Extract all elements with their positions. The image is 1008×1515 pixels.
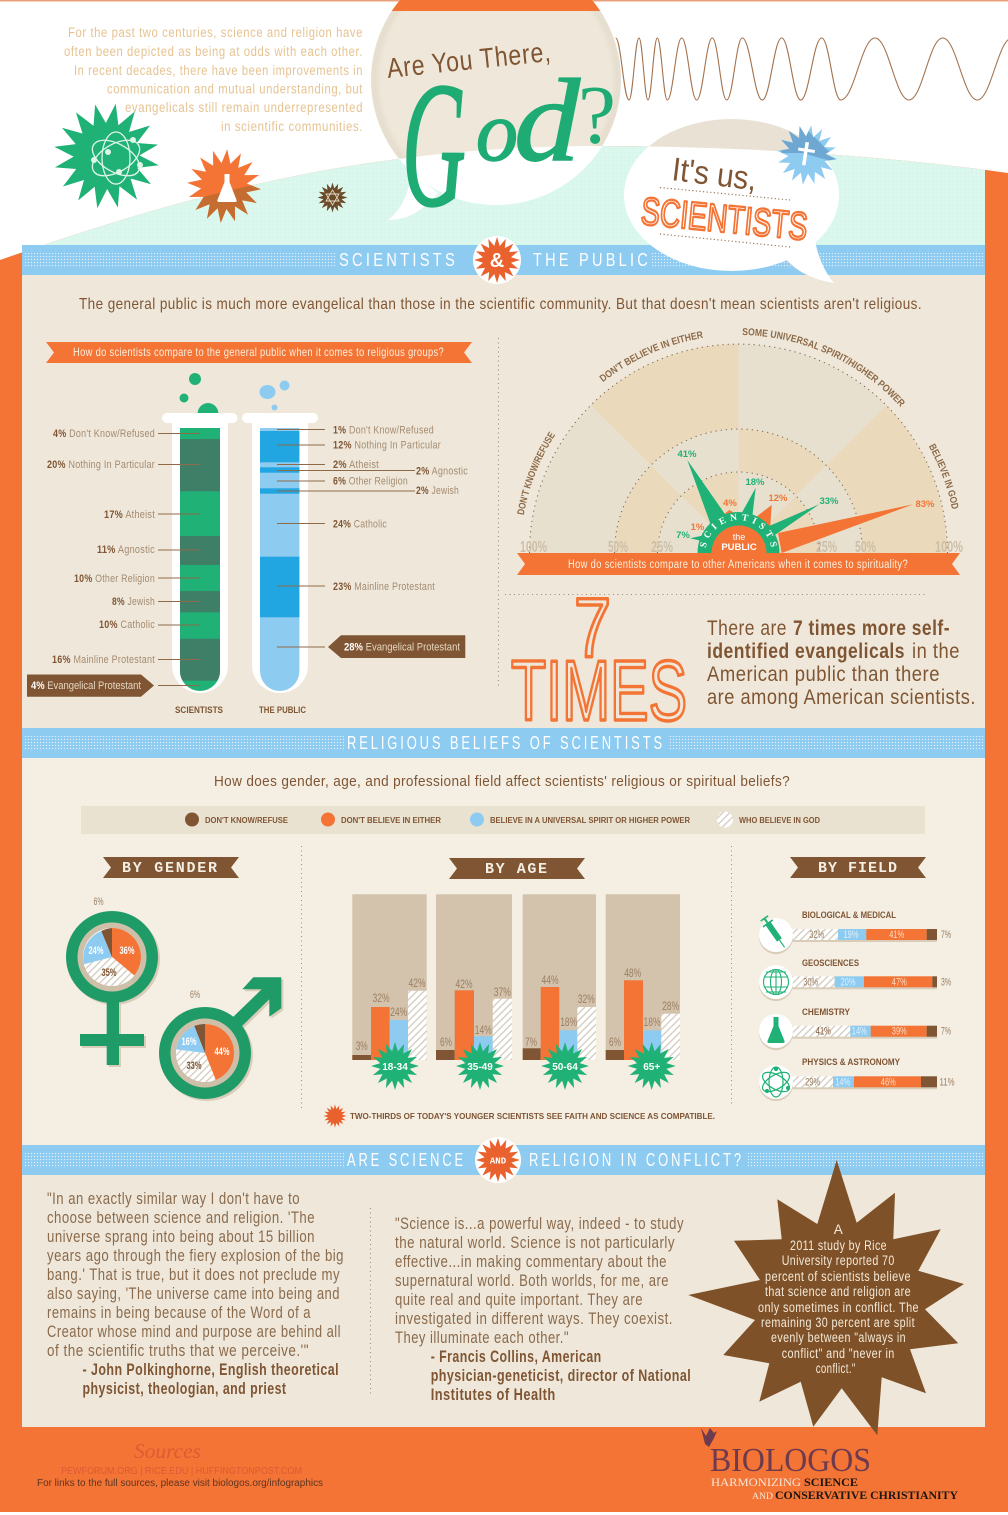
chart: by age bars: 65+ xyxy=(643,1062,660,1073)
wave line xyxy=(616,38,1008,100)
spike values: 33% xyxy=(819,496,839,507)
note: two-thirds: TWO-THIRDS OF TODAY'S YOUNGER SCIENTISTS SEE FAITH AND SCIENCE AS COMPATIBLE. xyxy=(350,1111,715,1121)
band: are science and religion in conflict: ARE SCIENCE xyxy=(347,1150,466,1170)
tube captions xyxy=(175,705,306,715)
chart: by age bars: 35-49 xyxy=(467,1062,493,1073)
quote: John Polkinghorne xyxy=(47,1190,344,1398)
age badges xyxy=(371,1042,676,1090)
chart: male symbol pie: 6% xyxy=(190,989,200,1001)
speech bubble: it's us scientists: SCIENTISTS xyxy=(639,190,809,249)
chart: chemistry: 41% xyxy=(816,1026,831,1038)
age group 18-34: 24% xyxy=(390,1007,407,1019)
callout: 7 times more: in the xyxy=(912,640,960,663)
footer: BioLogos logo: CONSERVATIVE CHRISTIANITY xyxy=(775,1488,958,1502)
speech bubble: it's us scientists: It's us, xyxy=(670,150,759,197)
tube captions: THE PUBLIC xyxy=(259,705,306,715)
callout star: rice study: percent of scientists believe xyxy=(765,1269,911,1284)
age group 50-64: 44% xyxy=(542,975,558,987)
band: scientists and the public: SCIENTISTS xyxy=(339,250,458,270)
chart: female symbol pie xyxy=(66,896,160,1067)
band: religious beliefs of scientists xyxy=(22,728,985,758)
tube captions: SCIENTISTS xyxy=(175,705,223,715)
footer: BioLogos logo: HARMONIZING xyxy=(711,1475,801,1489)
labels: the public: 2% Atheist xyxy=(333,459,379,471)
speech bubble: it's us scientists xyxy=(624,119,839,283)
age group 18-34: 3% xyxy=(356,1041,368,1053)
callout: 7 times more: identified evangelicals xyxy=(707,640,905,663)
age group 50-64: 18% xyxy=(560,1017,577,1029)
quote: Francis Collins: effective...in making commentary about the xyxy=(395,1253,667,1271)
quote: John Polkinghorne: bang.' That is true, but it does not preclude my xyxy=(47,1266,340,1284)
quote: Francis Collins: Institutes of Health xyxy=(431,1386,556,1404)
chart: physics and astronomy: 14% xyxy=(835,1076,850,1088)
labels: scientists: 8% Jewish xyxy=(112,596,155,608)
curved category labels xyxy=(517,328,958,515)
speech bubble: are you there god: G xyxy=(402,45,466,244)
quote: Francis Collins: quite real and quite important. They are xyxy=(395,1291,643,1309)
chart: geosciences: 3% xyxy=(941,976,951,988)
age group 65+: 48% xyxy=(624,968,641,980)
chart: physics and astronomy: PHYSICS & ASTRONOMY xyxy=(802,1057,900,1067)
callout: 7 times more xyxy=(707,617,976,709)
callout star: rice study: remaining 30 percent are split xyxy=(761,1315,915,1330)
callout star: rice study: only sometimes in conflict. The xyxy=(758,1300,919,1315)
age group 18-34: 32% xyxy=(372,993,390,1005)
speech bubble: are you there god: o xyxy=(476,83,518,179)
callout star: rice study: A xyxy=(834,1222,843,1237)
speech bubble: are you there god: d xyxy=(514,55,581,186)
center labels: PUBLIC xyxy=(721,542,757,553)
icon: flask star xyxy=(187,149,261,223)
quote: Francis Collins: - Francis Collins, American xyxy=(431,1348,602,1366)
headline: 7 times xyxy=(511,581,687,739)
curved category labels: DON'T KNOW/REFUSE xyxy=(517,432,556,515)
band: scientists and the public: THE PUBLIC xyxy=(533,250,651,270)
chart: female symbol pie: 35% xyxy=(102,967,117,979)
chart: female symbol pie: 24% xyxy=(88,945,104,957)
speech bubble: are you there god: Are You There, xyxy=(385,36,553,84)
footer: sources: For links to the full sources, please visit biologos.org/infographics xyxy=(37,1478,323,1489)
callout: 7 times more: 7 times more self- xyxy=(793,617,950,640)
chart: chemistry: 7% xyxy=(941,1026,951,1038)
semicircle chart: spirituality xyxy=(517,328,963,556)
age group 35-49: 14% xyxy=(475,1025,492,1037)
speech bubble: are you there god: ? xyxy=(578,69,616,162)
spike values: 41% xyxy=(677,449,697,460)
chart: biological and medical: 7% xyxy=(941,929,951,941)
labels: scientists: 16% Mainline Protestant xyxy=(52,654,155,666)
chart: physics and astronomy: 29% xyxy=(805,1076,820,1088)
intro text: often been depicted as being at odds with each other. xyxy=(64,44,363,59)
callout star: rice study: University reported 70 xyxy=(782,1253,895,1268)
quote: John Polkinghorne: remains in being because of the Word of a xyxy=(47,1304,311,1322)
footer: sources xyxy=(37,1439,323,1489)
age group 65+: 6% xyxy=(609,1037,621,1049)
chart: biological and medical xyxy=(759,910,951,954)
scale labels: 25% xyxy=(816,539,837,556)
chart: physics and astronomy: 46% xyxy=(881,1076,896,1088)
band: are science and religion in conflict xyxy=(22,1137,985,1183)
age group 35-49: 6% xyxy=(440,1037,452,1049)
icon: globe xyxy=(764,970,788,994)
ribbon: by field xyxy=(790,857,926,878)
age group 50-64: 32% xyxy=(578,994,595,1006)
tag: 4% evangelical protestant: 4% Evangelical Protestant xyxy=(31,680,141,692)
ribbon: spirituality question: How do scientists compare to other Americans when it comes to spirituality? xyxy=(568,559,908,571)
labels: the public: 2% Jewish xyxy=(416,485,459,497)
chart: male symbol pie: 33% xyxy=(186,1060,202,1072)
quote: John Polkinghorne: years ago through the fiery explosion of the big xyxy=(47,1247,344,1265)
labels: scientists: 20% Nothing In Particular xyxy=(47,459,155,471)
callout star: rice study xyxy=(688,1160,964,1435)
scale labels: 50% xyxy=(855,539,876,556)
labels: scientists: 17% Atheist xyxy=(104,509,155,521)
chart: biological and medical: 32% xyxy=(809,929,824,941)
labels: the public: 6% Other Religion xyxy=(333,476,408,488)
icon: dove xyxy=(701,1428,717,1447)
age group 18-34 xyxy=(352,978,427,1060)
legend: WHO BELIEVE IN GOD xyxy=(739,816,820,825)
age group 18-34: 42% xyxy=(408,978,426,990)
band: are science and religion in conflict: RELIGION IN CONFLICT? xyxy=(529,1150,744,1170)
orange spikes: the public xyxy=(703,504,913,553)
spike values: 4% xyxy=(723,498,737,509)
speech bubble: are you there god xyxy=(371,0,621,244)
labels: the public: 2% Agnostic xyxy=(416,466,468,478)
labels: the public: 24% Catholic xyxy=(333,518,387,530)
footer: sources: Sources xyxy=(134,1439,201,1463)
chart: biological and medical: 19% xyxy=(844,929,859,941)
spike values: 1% xyxy=(691,522,705,533)
labels: scientists: 10% Catholic xyxy=(99,619,155,631)
scale labels: 25% xyxy=(651,539,673,556)
legend: DON'T BELIEVE IN EITHER xyxy=(341,816,441,825)
chart: physics and astronomy: 11% xyxy=(940,1076,955,1088)
headline: 7 times: 7 xyxy=(574,581,611,675)
chart: male symbol pie xyxy=(159,977,283,1101)
callout: 7 times more: are among American scientists. xyxy=(707,686,976,709)
green spikes: scientists xyxy=(687,460,819,553)
icon: flask xyxy=(767,1017,785,1043)
spike values: 18% xyxy=(745,477,765,488)
ribbon: by age: BY AGE xyxy=(485,861,547,878)
icon: cross star xyxy=(778,126,837,184)
chart: female symbol pie: 6% xyxy=(94,896,104,908)
quote: Francis Collins: supernatural world. Both worlds, for me, are xyxy=(395,1272,669,1290)
icon: atom star xyxy=(45,95,168,217)
intro text: communication and mutual understanding, but xyxy=(107,82,363,96)
legend: BELIEVE IN A UNIVERSAL SPIRIT OR HIGHER POWER xyxy=(490,816,690,825)
note: two-thirds xyxy=(324,1104,715,1128)
chart: by age bars: 18-34 xyxy=(382,1062,408,1073)
test tube: the public xyxy=(242,380,318,693)
legend: DON'T KNOW/REFUSE xyxy=(205,816,289,825)
quote: John Polkinghorne: Creator whose mind and purpose are behind all xyxy=(47,1323,341,1341)
labels: the public: 1% Don't Know/Refused xyxy=(333,424,434,436)
intro text: In recent decades, there have been improvements in xyxy=(74,63,363,78)
ribbon: by gender xyxy=(103,857,239,878)
icon: star of David star xyxy=(318,182,348,212)
icon: atom xyxy=(760,1067,792,1097)
icon: syringe xyxy=(759,914,790,951)
chart: biological and medical: BIOLOGICAL & MEDICAL xyxy=(802,910,896,920)
test tube: scientists xyxy=(162,373,238,693)
quote: John Polkinghorne: physicist, theologian, and priest xyxy=(82,1380,286,1398)
chart: by age bars xyxy=(352,894,680,1090)
band: scientists and the public: & xyxy=(490,250,504,272)
callout star: rice study: that science and religion are xyxy=(765,1284,911,1299)
headline: 7 times: TIMES xyxy=(511,644,687,739)
curved category labels: DON'T BELIEVE IN EITHER xyxy=(599,331,704,382)
tag: 28% evangelical protestant: 28% Evangelical Protestant xyxy=(344,642,460,654)
spike values: 12% xyxy=(768,493,788,504)
quote: Francis Collins: They illuminate each other." xyxy=(395,1329,569,1347)
footer: BioLogos logo xyxy=(701,1428,958,1502)
chart: geosciences: 47% xyxy=(892,976,907,988)
chart: male symbol pie: 44% xyxy=(214,1046,230,1058)
quote: John Polkinghorne: choose between science and religion. 'The xyxy=(47,1209,315,1227)
scale labels: 100% xyxy=(520,539,547,556)
spike values xyxy=(676,449,935,541)
tag: 28% evangelical protestant xyxy=(328,635,465,658)
callout: 7 times more: There are xyxy=(707,617,787,640)
labels: scientists xyxy=(47,428,155,666)
labels: scientists: 11% Agnostic xyxy=(97,544,155,556)
labels: the public xyxy=(333,424,468,593)
chart: biological and medical: 41% xyxy=(889,929,904,941)
intro text: in scientific communities. xyxy=(221,119,363,134)
chart: by age bars: 50-64 xyxy=(552,1062,578,1073)
legend xyxy=(81,806,925,834)
quote: Francis Collins: physician-geneticist, director of National xyxy=(431,1367,691,1385)
scale labels: 50% xyxy=(608,539,628,556)
beliefs question: How does gender, age, and professional field affect scientists' religious or spiritual beliefs? xyxy=(214,773,790,790)
scale labels: 100% xyxy=(935,539,963,556)
chart: chemistry xyxy=(759,1007,951,1050)
footer: sources: PEWFORUM.ORG | RICE.EDU | HUFFINGTONPOST.COM xyxy=(61,1466,302,1477)
callout star: rice study: evenly between "always in xyxy=(771,1330,906,1345)
chart: female symbol pie: 36% xyxy=(120,945,135,957)
chart: geosciences: 20% xyxy=(840,976,856,988)
callout: 7 times more: American public than there xyxy=(707,663,940,686)
age group 65+: 28% xyxy=(662,1001,679,1013)
center labels: the xyxy=(733,532,745,542)
spike values: 83% xyxy=(915,499,935,510)
age group 35-49: 42% xyxy=(456,979,472,991)
quote: John Polkinghorne: - John Polkinghorne, English theoretical xyxy=(82,1361,339,1379)
spike values: 7% xyxy=(676,530,690,541)
callout star: rice study: conflict." xyxy=(816,1361,856,1376)
chart: geosciences: 30% xyxy=(803,976,818,988)
ribbon: by field: BY FIELD xyxy=(818,860,897,877)
center labels: SCIENTISTS xyxy=(700,514,777,548)
age group 50-64: 7% xyxy=(525,1037,537,1049)
age group 50-64 xyxy=(523,975,596,1060)
quote: John Polkinghorne: universe sprang into being about 15 billion xyxy=(47,1228,315,1246)
footer: BioLogos logo: SCIENCE xyxy=(804,1475,858,1489)
ribbon: by gender: BY GENDER xyxy=(122,860,217,877)
chart: physics and astronomy xyxy=(759,1057,955,1101)
quote: Francis Collins xyxy=(395,1215,691,1404)
chart: male symbol pie: 16% xyxy=(182,1036,197,1048)
scale labels xyxy=(520,539,963,556)
quote: Francis Collins: "Science is...a powerful way, indeed - to study xyxy=(395,1215,684,1233)
ribbon: religious groups question xyxy=(46,342,472,363)
age group 65+: 18% xyxy=(644,1017,660,1029)
intro text xyxy=(64,25,363,134)
age group 65+ xyxy=(606,968,680,1060)
leader lines xyxy=(158,430,415,686)
chart: chemistry: 39% xyxy=(892,1026,907,1038)
footer: BioLogos logo: AND xyxy=(752,1491,774,1501)
ribbon: spirituality question xyxy=(517,553,960,575)
band: scientists and the public xyxy=(22,236,985,284)
chart: chemistry: 14% xyxy=(852,1026,867,1038)
band: religious beliefs of scientists: RELIGIOUS BELIEFS OF SCIENTISTS xyxy=(347,733,665,753)
ribbon: religious groups question: How do scientists compare to the general public when it comes to religious groups? xyxy=(73,345,444,359)
callout star: rice study: 2011 study by Rice xyxy=(790,1238,887,1253)
tag: 4% evangelical protestant xyxy=(27,674,154,697)
labels: scientists: 4% Don't Know/Refused xyxy=(53,428,155,440)
intro text: evangelicals still remain underrepresented xyxy=(125,100,363,115)
labels: the public: 23% Mainline Protestant xyxy=(333,581,435,593)
labels: scientists: 10% Other Religion xyxy=(74,573,155,585)
chart: chemistry: CHEMISTRY xyxy=(802,1007,850,1017)
quote: Francis Collins: the natural world. Science is not particularly xyxy=(395,1234,675,1252)
ribbon: by age xyxy=(449,858,585,879)
labels: the public: 12% Nothing In Particular xyxy=(333,440,441,452)
quote: John Polkinghorne: also saying, 'The universe came into being and xyxy=(47,1285,340,1303)
chart: geosciences xyxy=(759,958,951,1001)
chart: geosciences: GEOSCIENCES xyxy=(802,958,859,968)
age group 35-49 xyxy=(436,979,512,1060)
footer: BioLogos logo: BIOLOGOS xyxy=(710,1442,871,1479)
callout star: rice study: conflict" and "never in xyxy=(782,1346,895,1361)
curved category labels: BELIEVE IN GOD xyxy=(929,443,958,509)
age group 35-49: 37% xyxy=(494,987,511,999)
band: are science and religion in conflict: AND xyxy=(490,1156,507,1166)
quote: John Polkinghorne: of the scientific truths that we perceive.'" xyxy=(47,1342,309,1360)
quote: Francis Collins: investigated in different ways. They coexist. xyxy=(395,1310,673,1328)
curved category labels: SOME UNIVERSAL SPIRIT/HIGHER POWER xyxy=(742,328,904,407)
quote: John Polkinghorne: "In an exactly similar way I don't have to xyxy=(47,1190,300,1208)
intro text: For the past two centuries, science and religion have xyxy=(68,25,363,40)
